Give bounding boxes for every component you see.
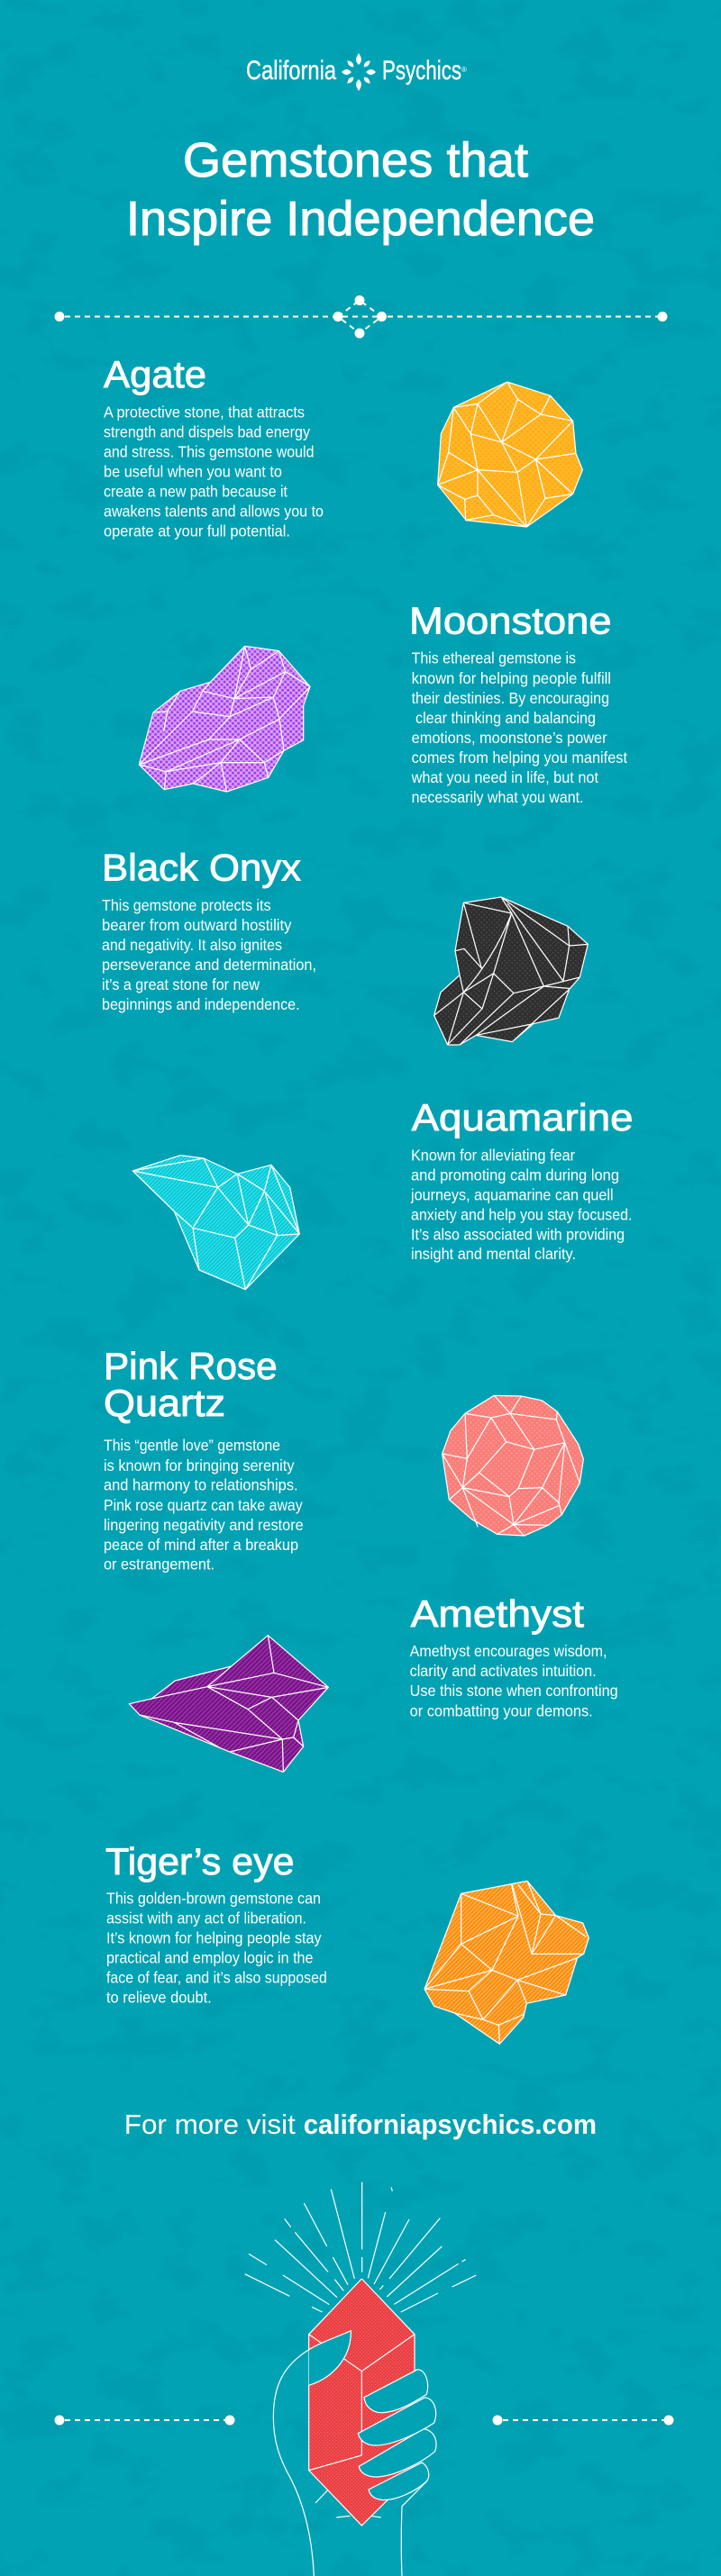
text: agate description: create a new path because it [104,482,287,500]
text: pink rose quartz description: lingering negativity and restore [104,1516,304,1534]
text: black onyx description: perseverance and determination, [102,956,316,974]
icon: aquamarine gem [132,1156,299,1290]
heading: tiger's eye: Tiger’s eye [105,1840,294,1882]
red gem [309,2279,415,2526]
text: black onyx description [102,896,316,1013]
text: amethyst description: clarity and activates intuition. [410,1662,597,1680]
panel: tiger's eye [105,1840,589,2044]
text: tiger's eye description [106,1890,327,2006]
text: pink rose quartz description [104,1437,304,1574]
light rays [245,2182,476,2517]
text: agate description: operate at your full potential. [104,522,290,540]
text: amethyst description: Amethyst encourages wisdom, [410,1642,607,1660]
text: tiger's eye description: It’s known for helping people stay [106,1928,322,1946]
call to action [124,2109,597,2140]
icon: black onyx gem [434,897,588,1045]
panel: pink rose quartz [104,1345,583,1574]
title [126,133,595,246]
text: tiger's eye description: This golden-brown gemstone can [106,1890,321,1908]
text: tiger's eye description: assist with any act of liberation. [106,1909,306,1927]
divider [54,295,667,339]
heading: pink rose quartz: Quartz [104,1382,225,1424]
text: amethyst description: or combatting your demons. [410,1701,593,1719]
heading: pink rose quartz [104,1345,278,1424]
text: agate description: be useful when you want to [104,463,282,481]
title: Gemstones that [183,133,528,187]
text: moonstone description: their destinies. By encouraging [412,689,609,707]
call to action: californiapsychics.com [304,2109,597,2140]
logo [246,53,467,91]
icon: moonstone gem [139,646,310,792]
text: moonstone description: clear thinking and balancing [415,709,596,727]
text: black onyx description: bearer from outward hostility [102,916,292,934]
text: tiger's eye description: to relieve doubt. [106,1988,212,2006]
icon: star logo [342,53,376,91]
text: pink rose quartz description: This “gentle love” gemstone [104,1437,280,1455]
text: amethyst description: Use this stone when confronting [410,1682,618,1700]
text: pink rose quartz description: peace of mind after a breakup [104,1536,298,1554]
text: agate description: A protective stone, that attracts [104,403,305,421]
text: black onyx description: This gemstone protects its [102,896,271,914]
icon: agate gem [438,382,582,527]
text: aquamarine description: anxiety and help you stay focused. [411,1205,633,1223]
text: moonstone description [411,649,627,806]
call to action: For more visit [124,2109,296,2140]
text: pink rose quartz description: or estrangement. [104,1556,214,1574]
logo: Psychics [382,56,461,86]
right dashed line [492,2416,674,2425]
text: moonstone description: what you need in life, but not [411,768,598,786]
heading: agate: Agate [104,353,206,395]
text: aquamarine description: Known for alleviating fear [411,1146,575,1164]
panel: aquamarine [132,1096,634,1290]
heading: moonstone: Moonstone [409,600,612,642]
text: pink rose quartz description: and harmony to relationships. [104,1476,298,1494]
text: agate description: awakens talents and allows you to [104,503,324,521]
text: aquamarine description: insight and mental clarity. [411,1245,576,1263]
text: agate description [104,403,324,540]
text: pink rose quartz description: Pink rose quartz can take away [104,1496,303,1514]
text: black onyx description: it’s a great stone for new [102,975,260,993]
text: pink rose quartz description: is known for bringing serenity [104,1456,295,1474]
text: aquamarine description [410,1146,633,1263]
panel: amethyst [129,1592,618,1772]
icon: pink rose quartz gem [443,1395,583,1536]
heading: amethyst: Amethyst [411,1592,584,1635]
text: moonstone description: comes from helping you manifest [412,748,627,766]
icon: amethyst gem [129,1636,328,1772]
text: moonstone description: known for helping people fulfill [412,669,611,687]
logo: California [246,56,336,86]
text: aquamarine description: It’s also associated with providing [411,1226,625,1244]
left dashed line [54,2416,234,2425]
text: moonstone description: necessarily what you want. [412,788,584,806]
heading: pink rose quartz: Pink Rose [104,1345,278,1387]
heading: aquamarine: Aquamarine [412,1096,633,1138]
text: aquamarine description: journeys, aquamarine can quell [410,1186,614,1204]
text: amethyst description [410,1642,618,1719]
hand [273,2331,436,2576]
text: agate description: and stress. This gemstone would [104,443,314,461]
text: black onyx description: and negativity. It also ignites [102,936,282,954]
text: tiger's eye description: face of fear, and it’s also supposed [106,1968,327,1986]
panel: black onyx [102,846,588,1045]
panel: moonstone [139,600,627,806]
illustration: hand holding gem [245,2182,476,2576]
text: tiger's eye description: practical and employ logic in the [106,1948,314,1966]
text: moonstone description: emotions, moonstone’s power [412,729,607,747]
logo: ® [461,66,467,74]
text: aquamarine description: and promoting calm during long [411,1166,619,1184]
title: Inspire Independence [126,192,595,246]
text: black onyx description: beginnings and independence. [102,995,300,1013]
heading: black onyx: Black Onyx [102,846,301,888]
text: moonstone description: This ethereal gemstone is [412,649,576,667]
panel: agate [104,353,582,540]
icon: tiger's eye gem [424,1881,589,2044]
text: agate description: strength and dispels bad energy [104,422,310,440]
